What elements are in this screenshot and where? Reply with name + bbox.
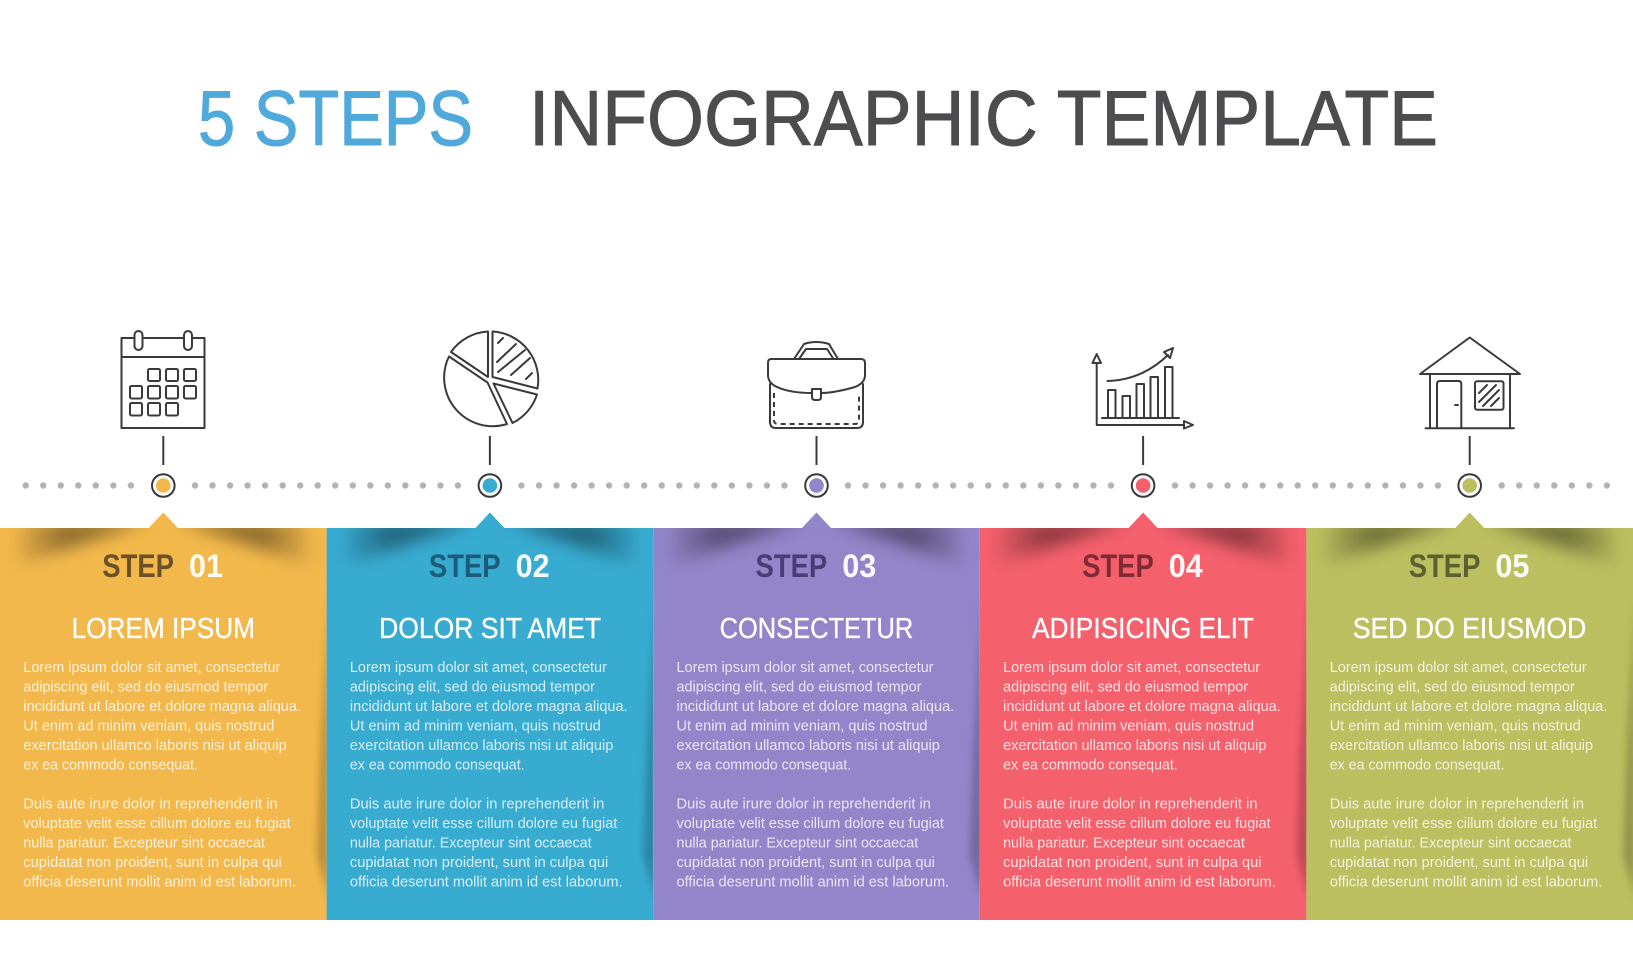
body text: adipiscing elit, sed do eiusmod tempor [1003, 680, 1248, 696]
body text: cupidatat non proident, sunt in culpa qui [677, 855, 935, 871]
marker 4 [1132, 436, 1154, 497]
body text: ex ea commodo consequat. [23, 758, 198, 774]
body text: incididunt ut labore et dolore magna aliqua. [1330, 699, 1607, 715]
icon: briefcase [768, 342, 865, 428]
body text: Duis aute irure dolor in reprehenderit in [1330, 796, 1584, 812]
step label: 02 [516, 548, 550, 584]
body text: Duis aute irure dolor in reprehenderit in [350, 796, 604, 812]
step label: 01 [189, 548, 223, 584]
body text: exercitation ullamco laboris nisi ut aliquip [677, 738, 940, 754]
body text [1330, 660, 1607, 890]
body text: Duis aute irure dolor in reprehenderit in [677, 796, 931, 812]
step label: 05 [1495, 548, 1529, 584]
body text: ex ea commodo consequat. [1330, 758, 1504, 774]
body text: voluptate velit esse cillum dolore eu fugiat [350, 816, 617, 832]
step label: STEP [102, 548, 174, 584]
body text: cupidatat non proident, sunt in culpa qui [23, 855, 282, 871]
step label [756, 548, 876, 584]
body text: officia deserunt mollit anim id est laborum. [23, 874, 296, 890]
body text: Ut enim ad minim veniam, quis nostrud [23, 719, 274, 735]
title: infographic template: INFOGRAPHIC TEMPLATE [529, 74, 1438, 162]
panel: step 05 [1306, 512, 1633, 920]
step label: STEP [1082, 548, 1154, 584]
body text: Ut enim ad minim veniam, quis nostrud [1330, 719, 1581, 735]
dotted timeline [26, 482, 1610, 489]
body text: nulla pariatur. Excepteur sint occaecat [350, 836, 592, 852]
body text: Duis aute irure dolor in reprehenderit in [1003, 796, 1257, 812]
body text: nulla pariatur. Excepteur sint occaecat [1330, 836, 1571, 852]
body text: nulla pariatur. Excepteur sint occaecat [23, 836, 265, 852]
body text: adipiscing elit, sed do eiusmod tempor [677, 680, 922, 696]
body text: ex ea commodo consequat. [677, 758, 851, 774]
panel: step 04 [980, 512, 1309, 920]
body text: exercitation ullamco laboris nisi ut aliquip [350, 738, 613, 754]
body text: nulla pariatur. Excepteur sint occaecat [1003, 836, 1245, 852]
step label: STEP [429, 548, 501, 584]
body text: nulla pariatur. Excepteur sint occaecat [677, 836, 918, 852]
body text: Lorem ipsum dolor sit amet, consectetur [350, 660, 607, 676]
body text: Lorem ipsum dolor sit amet, consectetur [1330, 660, 1587, 676]
body text: incididunt ut labore et dolore magna aliqua. [1003, 699, 1281, 715]
body text: Ut enim ad minim veniam, quis nostrud [350, 719, 601, 735]
panel: step 03 [653, 512, 982, 920]
panel: step 02 [327, 512, 656, 920]
body text: voluptate velit esse cillum dolore eu fugiat [677, 816, 944, 832]
body text: Ut enim ad minim veniam, quis nostrud [1003, 719, 1254, 735]
body text: adipiscing elit, sed do eiusmod tempor [1330, 680, 1575, 696]
body text: ex ea commodo consequat. [350, 758, 525, 774]
marker 1 [152, 436, 175, 497]
body text: Duis aute irure dolor in reprehenderit in [23, 796, 278, 812]
body text: incididunt ut labore et dolore magna aliqua. [677, 699, 954, 715]
icon: pie chart [444, 332, 538, 426]
title [198, 74, 1438, 162]
step label: 03 [842, 548, 876, 584]
body text: officia deserunt mollit anim id est laborum. [1330, 874, 1602, 890]
step label: STEP [756, 548, 827, 584]
body text [23, 660, 301, 890]
marker 5 [1458, 436, 1481, 497]
step label: STEP [1409, 548, 1480, 584]
icon: house [1420, 338, 1520, 428]
body text: Lorem ipsum dolor sit amet, consectetur [1003, 660, 1260, 676]
body text: adipiscing elit, sed do eiusmod tempor [23, 680, 268, 696]
step label [102, 548, 223, 584]
panel heading: LOREM IPSUM [72, 613, 255, 645]
panel background [327, 512, 653, 920]
body text: voluptate velit esse cillum dolore eu fugiat [23, 816, 291, 832]
panel background [980, 512, 1306, 920]
body text: voluptate velit esse cillum dolore eu fugiat [1003, 816, 1270, 832]
title: 5 steps: 5 STEPS [198, 74, 473, 162]
icon: calendar [122, 331, 204, 428]
body text: Ut enim ad minim veniam, quis nostrud [677, 719, 927, 735]
body text: cupidatat non proident, sunt in culpa qui [350, 855, 608, 871]
panel background [1306, 512, 1633, 920]
body text: ex ea commodo consequat. [1003, 758, 1178, 774]
body text: incididunt ut labore et dolore magna aliqua. [350, 699, 628, 715]
panel background [0, 512, 327, 920]
body text: exercitation ullamco laboris nisi ut aliquip [1330, 738, 1593, 754]
body text: officia deserunt mollit anim id est laborum. [350, 874, 623, 890]
panel heading: CONSECTETUR [720, 613, 913, 645]
panel background [653, 512, 980, 920]
body text: Lorem ipsum dolor sit amet, consectetur [677, 660, 934, 676]
step label: 04 [1169, 548, 1203, 584]
icon: growth chart [1092, 348, 1193, 428]
marker 2 [479, 436, 501, 497]
body text [676, 660, 954, 890]
body text [1003, 660, 1281, 890]
body text: exercitation ullamco laboris nisi ut aliquip [1003, 738, 1266, 754]
step label [429, 548, 550, 584]
body text: exercitation ullamco laboris nisi ut aliquip [23, 738, 287, 754]
body text [350, 660, 628, 890]
panel: step 01 [0, 512, 329, 920]
panel heading: SED DO EIUSMOD [1353, 613, 1586, 645]
body text: Lorem ipsum dolor sit amet, consectetur [23, 660, 280, 676]
step label [1082, 548, 1203, 584]
body text: incididunt ut labore et dolore magna aliqua. [23, 699, 301, 715]
body text: cupidatat non proident, sunt in culpa qui [1003, 855, 1261, 871]
body text: voluptate velit esse cillum dolore eu fugiat [1330, 816, 1597, 832]
body text: officia deserunt mollit anim id est laborum. [677, 874, 949, 890]
step label [1409, 548, 1529, 584]
panel heading: ADIPISICING ELIT [1032, 613, 1254, 645]
marker 3 [805, 436, 828, 497]
body text: cupidatat non proident, sunt in culpa qui [1330, 855, 1588, 871]
body text: adipiscing elit, sed do eiusmod tempor [350, 680, 595, 696]
panel heading: DOLOR SIT AMET [379, 613, 601, 645]
body text: officia deserunt mollit anim id est laborum. [1003, 874, 1276, 890]
